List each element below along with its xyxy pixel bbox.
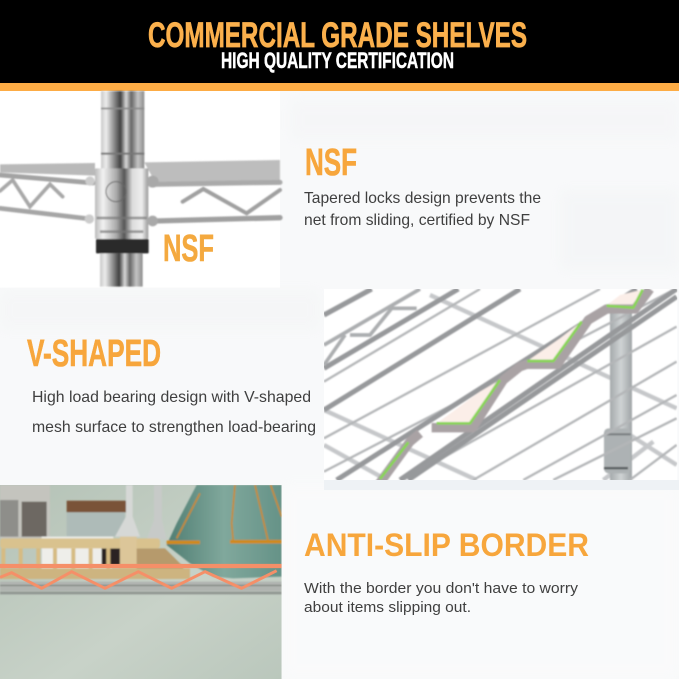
NSF description: Tapered locks design prevents the bbox=[304, 190, 541, 207]
utensils bbox=[115, 485, 140, 537]
V-shaped wire bbox=[378, 289, 650, 485]
locking sleeve bbox=[95, 168, 148, 239]
pale strip under photo bbox=[324, 480, 679, 490]
wire joints bbox=[85, 176, 95, 186]
panel: NSF photo bbox=[0, 91, 280, 288]
V-shaped heading: V-SHAPED bbox=[27, 333, 161, 375]
upright pole bbox=[101, 91, 144, 169]
shelf rail bbox=[0, 582, 282, 591]
NSF description: net from sliding, certified by NSF bbox=[304, 212, 530, 229]
subtitle: HIGH QUALITY CERTIFICATION bbox=[221, 48, 454, 73]
anti-slip heading: ANTI-SLIP BORDER bbox=[304, 527, 589, 563]
orange anti-slip wire bbox=[0, 566, 282, 588]
green vase bbox=[167, 485, 282, 578]
green highlight bbox=[380, 290, 643, 479]
header band bbox=[0, 0, 679, 91]
anti-slip description bbox=[304, 580, 579, 616]
thin mesh wires bbox=[324, 288, 677, 480]
bowl and basket bbox=[42, 537, 113, 568]
NSF description bbox=[304, 190, 541, 229]
title: COMMERCIAL GRADE SHELVES bbox=[148, 16, 527, 55]
glass jars bbox=[0, 485, 50, 538]
panel: anti-slip photo bbox=[0, 485, 282, 679]
V-shaped description: High load bearing design with V-shaped bbox=[32, 389, 311, 406]
NSF heading: NSF bbox=[305, 142, 357, 184]
NSF photo label: NSF bbox=[163, 228, 214, 270]
panel: V-shaped mesh photo bbox=[324, 288, 679, 490]
main rails bbox=[324, 289, 677, 480]
V-shaped description: mesh surface to strengthen load-bearing bbox=[32, 419, 316, 436]
V-shaped description bbox=[32, 389, 316, 436]
anti-slip description: With the border you don't have to worry bbox=[304, 580, 579, 597]
shelf mesh surface bbox=[0, 163, 95, 176]
black band bbox=[96, 239, 149, 253]
anti-slip description: about items slipping out. bbox=[304, 599, 471, 616]
pale V interior bbox=[437, 290, 643, 423]
support post bbox=[610, 308, 632, 482]
cross wires bbox=[324, 295, 677, 480]
shelf wires bbox=[0, 175, 280, 221]
